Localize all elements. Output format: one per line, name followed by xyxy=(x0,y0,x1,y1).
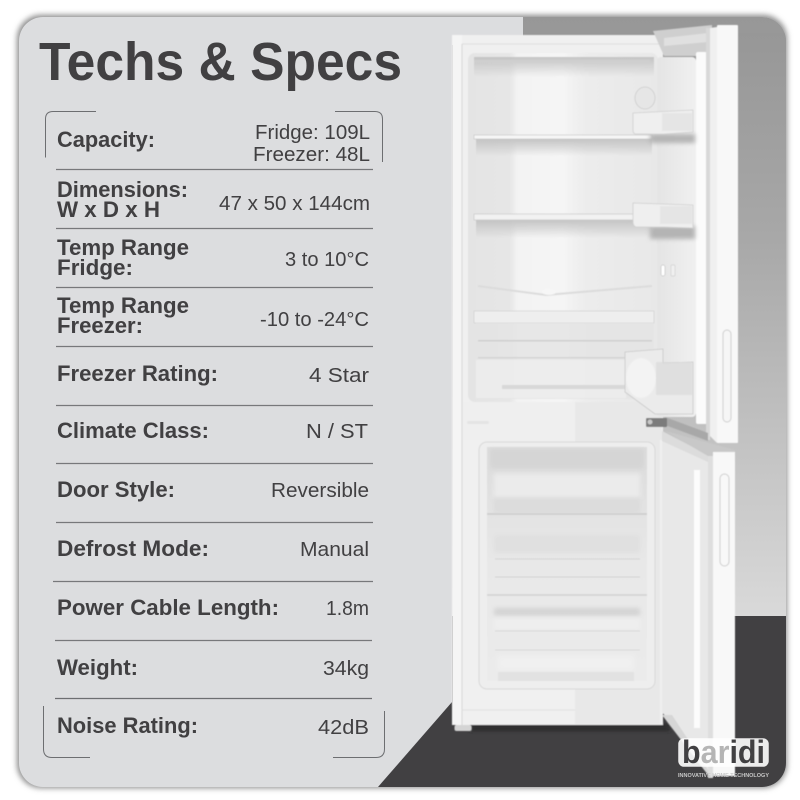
row: noise rating xyxy=(57,713,369,739)
row: door style: Door Style: xyxy=(57,477,175,502)
row: temp range fridge xyxy=(57,235,369,280)
row: weight: Weight: xyxy=(57,655,138,680)
row: dimensions: W x D x H xyxy=(57,197,160,222)
door vents xyxy=(661,265,665,276)
row: temp range freezer: Temp Range xyxy=(57,293,189,318)
row: noise rating: Noise Rating: xyxy=(57,713,198,738)
row: temp range fridge: Fridge: xyxy=(57,255,133,280)
row: climate class xyxy=(57,418,368,443)
title: Techs & Specs xyxy=(39,32,402,92)
capacity bracket xyxy=(46,112,382,162)
floor shadow xyxy=(470,724,670,731)
upper door xyxy=(625,25,738,443)
back panel ridge xyxy=(478,286,652,295)
foot xyxy=(454,725,472,731)
row: power cable length: 1.8m xyxy=(326,598,369,620)
middle hinge xyxy=(646,417,708,441)
row: temp range fridge: Temp Range xyxy=(57,235,189,260)
lower door handle xyxy=(720,474,729,566)
row: defrost mode: Defrost Mode: xyxy=(57,536,209,561)
row: dimensions: Dimensions: xyxy=(57,177,188,202)
row: capacity: Freezer: 48L xyxy=(253,144,370,166)
logo plate xyxy=(679,739,768,766)
fridge compartment xyxy=(468,53,658,402)
row: freezer rating: Freezer Rating: xyxy=(57,361,218,386)
row: defrost mode: Manual xyxy=(300,539,369,561)
row: freezer rating xyxy=(57,361,369,387)
door handle xyxy=(723,330,731,422)
row: noise rating: 42dB xyxy=(318,717,369,739)
freezer compartment xyxy=(479,442,655,689)
logo xyxy=(678,734,769,779)
door bin: middle xyxy=(650,226,695,239)
spec table xyxy=(44,112,384,758)
door knob xyxy=(635,87,655,109)
row: door style: Reversible xyxy=(271,480,369,502)
fridge illustration xyxy=(452,25,738,778)
door bin: top xyxy=(650,134,695,143)
row: temp range freezer xyxy=(57,293,369,338)
logo wordmark: baridi xyxy=(682,734,765,770)
row: temp range fridge: 3 to 10°C xyxy=(285,249,369,271)
row: capacity: Capacity: xyxy=(57,127,155,152)
shelf: middle xyxy=(474,214,652,220)
row: capacity: Fridge: 109L xyxy=(255,122,370,144)
row: temp range freezer: Freezer: xyxy=(57,313,143,338)
door bin: bottom xyxy=(625,349,693,414)
logo tagline: INNOVATIVE HOME TECHNOLOGY xyxy=(678,773,769,779)
freezer drawers xyxy=(490,449,644,469)
row: dimensions: 47 x 50 x 144cm xyxy=(219,193,370,215)
lower shelf divider grille xyxy=(464,402,662,440)
row: weight xyxy=(57,655,369,680)
row: climate class: Climate Class: xyxy=(57,418,209,443)
cabinet body xyxy=(452,35,663,725)
row: climate class: N / ST xyxy=(306,421,368,443)
row: weight: 34kg xyxy=(323,658,369,680)
row: power cable length: Power Cable Length: xyxy=(57,595,279,620)
lower door xyxy=(662,431,735,778)
shelf: top xyxy=(474,135,652,139)
noise bracket xyxy=(44,706,384,758)
row: temp range freezer: -10 to -24°C xyxy=(260,309,369,331)
crisper drawer xyxy=(474,311,654,399)
row: door style xyxy=(57,477,369,502)
row: defrost mode xyxy=(57,536,369,561)
row: freezer rating: 4 Star xyxy=(309,365,369,387)
row: capacity xyxy=(57,122,370,166)
row: dimensions xyxy=(57,177,370,222)
